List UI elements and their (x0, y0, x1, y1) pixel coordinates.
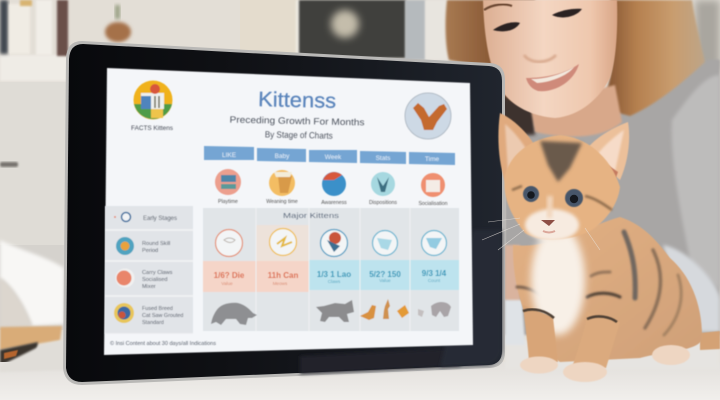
kitten chest (531, 225, 585, 335)
growth captions: Count (428, 278, 441, 283)
muzzle (525, 209, 579, 241)
list row 4: Standard (142, 320, 164, 326)
forehead stripes (540, 141, 582, 182)
stage tabs: Stats (376, 155, 391, 162)
blue band (309, 260, 459, 290)
tablet (63, 41, 505, 385)
tablet screen (104, 68, 473, 355)
kitten front legs (523, 305, 558, 362)
kitten eyes (523, 186, 583, 207)
leg stripes (523, 309, 617, 322)
hair right (600, 0, 705, 116)
neck (530, 85, 622, 137)
kitten ears (498, 113, 537, 182)
list row 2 (116, 237, 170, 255)
growth figures: 1/3 1 Lao (317, 270, 351, 279)
growth captions: Value (221, 281, 233, 286)
stage captions: Weaning time (266, 199, 298, 205)
stage captions: Playtime (218, 199, 238, 205)
stage tabs: Time (425, 156, 439, 163)
peach band (203, 261, 309, 292)
stage captions: Awareness (321, 200, 347, 206)
stage tabs: Week (325, 154, 342, 161)
cheek stripes (512, 186, 612, 210)
list row 3: Socialised (142, 277, 168, 283)
chart heading: Major Kittens (283, 211, 339, 220)
animal silhouettes (211, 299, 451, 325)
woman (446, 0, 720, 345)
growth circles (216, 228, 446, 256)
kitten body (513, 217, 702, 362)
tablet frame (63, 41, 505, 385)
eyes (493, 22, 520, 31)
growth captions (221, 278, 441, 286)
list row 3: Mixer (142, 284, 156, 290)
sweater (505, 59, 720, 335)
stage icons (215, 169, 445, 197)
kitten head (504, 135, 620, 240)
nose shadow (524, 55, 556, 62)
kitten whiskers (482, 218, 600, 250)
icon: orange check badge (405, 93, 451, 139)
growth figures (214, 269, 447, 280)
bed, pillow and book (0, 240, 720, 400)
subtitle: Preceding Growth For Months (229, 115, 365, 127)
stage captions: Socialisation (418, 201, 448, 207)
growth figures: 11h Can (268, 271, 298, 280)
stage tabs: Baby (275, 153, 290, 160)
kitten (482, 113, 720, 382)
footer note: © Insi Content about 30 days/all Indications (110, 340, 216, 347)
subtitle: By Stage of Charts (265, 129, 333, 141)
growth captions: Meows (273, 281, 288, 286)
panel: left list (105, 206, 193, 334)
kitten tail (700, 331, 720, 350)
face (483, 0, 617, 118)
list row 2: Period (142, 248, 158, 254)
list row 4 (114, 303, 183, 326)
growth figures: 9/3 1/4 (422, 269, 447, 278)
list row 4: Fused Breed (142, 306, 173, 312)
kitten nose and mouth (541, 220, 555, 232)
logo (134, 80, 172, 120)
body stripes (517, 232, 681, 335)
logo caption: FACTS Kittens (131, 125, 173, 132)
list row 2: Round Skill (142, 241, 170, 247)
list row 1: Early Stages (143, 216, 177, 222)
smile (526, 64, 579, 91)
hair left (446, 0, 535, 125)
growth captions: Value (379, 278, 391, 283)
list row 4: Cat Saw Grouted (142, 313, 183, 319)
growth figures: 1/6? Die (214, 271, 245, 280)
stage captions (218, 199, 448, 207)
panel: main chart table (203, 208, 459, 331)
list row 3: Carry Claws (142, 270, 173, 276)
growth captions: Claws (328, 279, 341, 284)
subtitle (229, 115, 365, 141)
title: Kittenss (258, 88, 336, 113)
gap behind kitten (505, 245, 520, 305)
growth figures: 5/2? 150 (369, 270, 401, 279)
kitten paws (520, 345, 690, 382)
stage tabs: LIKE (222, 152, 237, 159)
stage captions: Dispositions (369, 200, 397, 206)
stage tabs (204, 146, 455, 165)
list row 3 (116, 268, 173, 290)
